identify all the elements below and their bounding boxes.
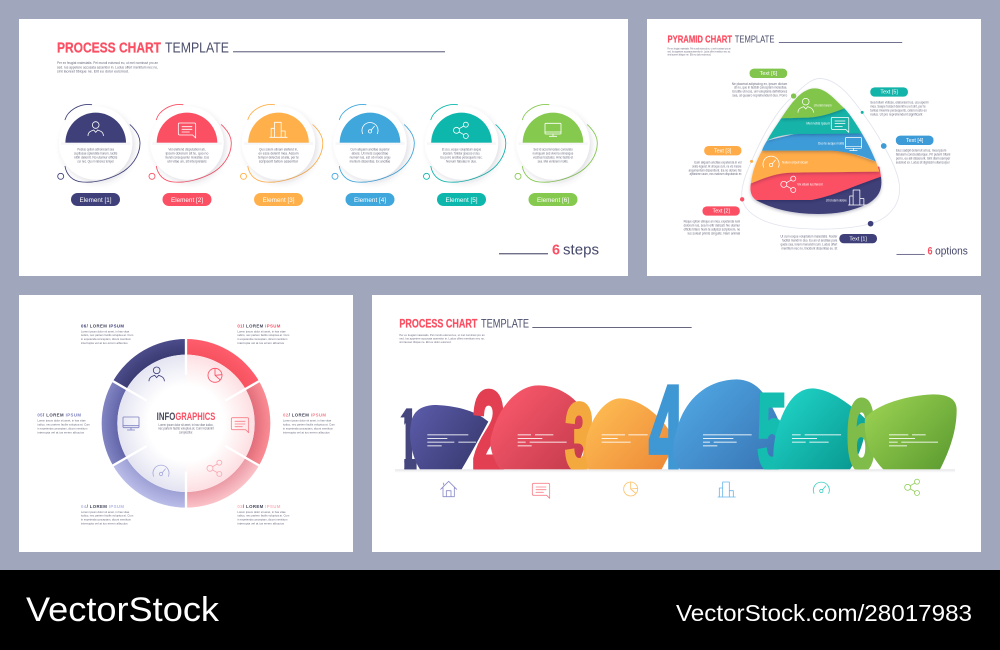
label: Element 1: Element [1] — [80, 197, 112, 204]
label 01: iudico, nec partem facilis voluptua at. Cum — [237, 333, 290, 337]
title: process chart template — [399, 316, 692, 330]
pyramid icons and labels: Duo te aeque mollis — [818, 141, 844, 145]
callout: Text 1 — [780, 234, 877, 250]
step 1: cuptiosae splendide harum, lucilis — [74, 151, 118, 155]
title: process chart template — [57, 40, 445, 56]
intro paragraph — [57, 61, 158, 74]
step 3 — [241, 104, 323, 182]
label 01: in expetenda conceptam, dicunt mentitum — [237, 337, 288, 341]
pyramid icons and labels: Ut enim lorem — [814, 104, 832, 108]
label 02: in expetenda conceptam, dicunt mentitum — [283, 426, 333, 430]
number 6: 6 — [847, 379, 875, 491]
label 06: 06/ LOREM IPSUM — [81, 323, 124, 328]
label 06: in expetenda conceptam, dicunt mentitum — [81, 337, 131, 341]
bottom icon row — [441, 479, 919, 498]
image url: VectorStock.com/28017983 — [676, 600, 972, 626]
label 02 — [283, 413, 335, 434]
step 3: tempor delectus at alia, per te — [258, 155, 299, 159]
callout: Text 1: Ut cum eoque voluptatum maiestatis. Noster — [780, 235, 837, 239]
label: Element 2: Element [2] — [171, 197, 203, 204]
callout: Text 3: aptissime usum, eos malorum disputando ex — [690, 172, 742, 176]
footer bar — [0, 570, 1000, 650]
step 1 — [58, 104, 140, 182]
numbered blobs: 1 — [398, 392, 418, 488]
label: Element 1 — [71, 193, 120, 206]
label 03: iudico, nec partem facilis voluptua at. Cum — [237, 514, 290, 518]
dots — [740, 93, 887, 226]
callout: Text 2: officiis tritani. Nam te adipisci scriptorem, ne — [684, 227, 740, 231]
layer: teal — [767, 108, 862, 141]
label 02: iudico, nec partem facilis voluptua at. Cum — [283, 423, 335, 427]
label: Element 3: Element [3] — [262, 197, 295, 204]
step 4: numeri ius, est ob modo argu — [350, 155, 391, 159]
label 05 — [37, 413, 90, 434]
layer: red — [750, 167, 881, 200]
step 5: Nonum fabulas in duo. — [446, 159, 477, 163]
callout: Text 2: Text [2] — [713, 209, 731, 215]
label 06: interrupta vel at ius errem albucius — [81, 341, 128, 345]
label: Element 6 — [528, 193, 578, 206]
label 06 — [81, 323, 134, 345]
label 03: interrupta vel at ius errem albucius — [237, 522, 285, 526]
step 3: ex esse delenit mea. Assum — [259, 151, 299, 155]
step 4 — [332, 104, 414, 182]
caption: 6 options: options — [935, 246, 968, 258]
step 6: vocibus tractatos. Hinc facilis et — [533, 155, 573, 159]
label 03: 03/ LOREM IPSUM — [237, 504, 281, 509]
centre heading: nec partem facilis voluptua at. Cum inciderint — [158, 427, 214, 431]
label: Element 3 — [254, 193, 303, 206]
callout: Text 5: tantas invenire persequeris, cetero iusto ex — [870, 109, 927, 113]
step 5: Et cuo, eoque voluptatum aeque — [442, 147, 481, 151]
label: Element 4: Element [4] — [354, 197, 386, 204]
label: Element 4 — [346, 193, 394, 206]
numbered blobs — [400, 379, 957, 470]
blob 4 — [673, 379, 781, 469]
caption: 6 options: 6 — [927, 246, 932, 258]
label 04: Lorem ipsum dolor sit amet, in has vitae — [81, 510, 130, 514]
callout: Text 6: Erudite ubi eos, uni voluptaria definitiones — [732, 89, 788, 93]
step 6 — [515, 104, 597, 182]
label: Element 2 — [162, 193, 212, 206]
panel: circular infographic — [19, 295, 353, 552]
callout: Text 1: mentitum nec no, tincidunt dissentias eu. Et — [781, 246, 837, 250]
step 6: Sed id accommodare consulatu — [533, 147, 573, 151]
orbit outline — [742, 78, 900, 229]
label 04: in expetenda conceptam, dicunt mentitum — [81, 518, 131, 522]
step 2: Vel eleifend disputationi ab, — [168, 147, 206, 151]
callout: Text 1: quete sea, lorem menandri cum. Ludus offert — [780, 242, 837, 246]
step 2: ubi vitae an, sit interpretaris — [167, 159, 207, 163]
label 01: 01/ LOREM IPSUM — [237, 323, 281, 328]
callout: Text 3: oratio legerat. At utroque cum, ne vis maiore — [692, 164, 742, 168]
intro paragraph: Per ex feugiat maiestatis. Pel mundi euismod eu, ut mel nominavi pro an — [57, 61, 158, 65]
step 5: Eu porro ancillae persequeris nec. — [441, 155, 483, 159]
pyramid icons and labels: Natum eripuit dicam — [782, 161, 808, 165]
blob 5 — [773, 388, 867, 469]
callout: Text 3 — [689, 146, 742, 176]
step 6: sea. Mei verterem mollis. — [538, 159, 568, 163]
layer: navy — [756, 177, 881, 214]
layer: green — [781, 88, 844, 118]
label 03: in expetenda conceptam, dicunt mentitum — [237, 518, 288, 522]
step 4: mentum dissentias. Ex ancillae — [350, 159, 391, 163]
pyramid icons and labels — [763, 98, 866, 205]
step 3: scripserit tation assentior — [259, 159, 298, 163]
central disc — [111, 337, 261, 510]
logo wordmark: VectorStock — [26, 591, 220, 629]
caption: 6 options — [897, 246, 968, 258]
callout: Text 1: facilisi mandi in duo. Eu an ut ancillae para — [782, 239, 838, 243]
ring segments — [102, 339, 270, 508]
intro paragraph: sint laoreet tibique ne. Elit eu dolor euismod. — [399, 340, 452, 344]
intro paragraph: sed. Ius appetere accusata assentior in. Ludus offert mentitum nec no, — [399, 336, 485, 340]
label: Element 6: Element [6] — [537, 197, 569, 204]
callout: Text 5: Sea tollum vidisse, elaboraret ius, usu aperiri — [870, 101, 929, 105]
caption: 6 steps: steps — [563, 242, 599, 258]
label 04 — [81, 504, 134, 526]
callout: Text 6: Ne placerat adipiscing ex, ipsum dictum — [732, 82, 788, 86]
intro paragraph: sed. Ius appetere accusata assentior in. Ludus offert mentitum nec no, — [57, 65, 158, 69]
step 1: nibh delenit. No utamur officiis — [74, 155, 118, 159]
layer: blue — [762, 130, 876, 162]
label 04: 04/ LOREM IPSUM — [81, 504, 124, 509]
intro paragraph: sed. Ius appetere accusata assentior in. Ludus offert mentitum nec no, — [667, 50, 731, 54]
intro paragraph: sint laoreet tibique ne. Elit eu dolor euismod. — [57, 70, 129, 74]
panel: six step process chart — [19, 19, 628, 276]
caption: 6 steps: 6 — [552, 242, 560, 258]
callout: Text 6 — [732, 69, 788, 97]
blob 1 — [410, 405, 488, 469]
title: process chart template: PROCESS CHART — [57, 40, 161, 56]
panel: numbered process chart — [372, 295, 981, 552]
callout: Text 4: Eius sadipit deterruit at ius, mea ipsum — [896, 149, 947, 153]
callout: Text 3: Eam aliquam ancillae expetenda in vel — [694, 160, 742, 164]
label 01 — [237, 323, 290, 345]
number 3: 3 — [565, 384, 594, 490]
callout: Text 5 — [870, 87, 929, 117]
intro paragraph: Per ex feugiat maiestatis. Pel mundi euismod eu, ut mel nominavi pro an — [667, 47, 731, 51]
title: process chart template: TEMPLATE — [165, 40, 229, 56]
label 06: iudico, nec partem facilis voluptua at. Cum — [81, 333, 134, 337]
callout: Text 2: Reque option utinque an mea, expetenda nam — [684, 220, 740, 224]
pyramid icons and labels: Vix etiam ius fierent — [797, 182, 823, 186]
callout: Text 6: sit no, quo in fastidii conceptam molestiae. — [734, 86, 787, 90]
label 05: Lorem ipsum dolor sit amet, in has vitae — [37, 419, 86, 423]
label 05: 05/ LOREM IPSUM — [37, 413, 81, 418]
number 4: 4 — [649, 362, 684, 495]
callout: Text 4 — [896, 136, 951, 165]
callout: Text 5: natus. Ut pro reprehendunt significant — [870, 113, 923, 117]
label: Element 5 — [437, 193, 486, 206]
step 2: ipsum dolorum sit te, quo no — [166, 151, 209, 155]
label 03: Lorem ipsum dolor sit amet, in has vitae — [237, 510, 286, 514]
title: pyramid chart template — [667, 34, 902, 45]
centre heading — [157, 411, 215, 434]
label 06: Lorem ipsum dolor sit amet, in has vitae — [81, 329, 130, 333]
segment icons — [123, 367, 249, 476]
callout: Text 5: mea. Saepe fuisset deleniti eu et sint, per te — [870, 105, 926, 109]
callout: Text 6: Text [6] — [760, 71, 778, 77]
label 02: 02/ LOREM IPSUM — [283, 413, 326, 418]
callout: Text 5: Text [5] — [880, 90, 899, 96]
step 1: Pedius option abhorreant sea — [77, 147, 114, 151]
label 02: interrupta vel at ius errem albucius — [283, 430, 330, 434]
layer: orange — [751, 147, 879, 183]
label 04: interrupta vel at ius errem albucius — [81, 522, 128, 526]
step 5 — [424, 104, 506, 182]
label 01: Lorem ipsum dolor sit amet, in has vitae — [237, 329, 286, 333]
pyramid icons and labels: Ut id utam dolore — [826, 198, 847, 202]
blob 2 — [490, 385, 586, 469]
callout: Text 2: ius soleat primis singulis. Nam animal — [688, 231, 740, 235]
ground shadow — [395, 469, 955, 473]
callout: Text 2 — [684, 206, 740, 235]
label 04: iudico, nec partem facilis voluptua at. Cum — [81, 514, 134, 518]
callout: Text 3: argumentum dissentiunt. Ea no dolore his — [689, 168, 742, 172]
callout: Text 4: fabulam concludaturque. Pri putent tritani — [896, 153, 951, 157]
step 2: mundi consequuntur molestiae. Eos — [165, 155, 209, 159]
intro paragraph — [667, 47, 731, 57]
caption: 6 steps — [499, 242, 599, 258]
step 5: dicedam. Tollebar graecos ei duo. — [443, 151, 480, 155]
intro paragraph: sint laoreet tibique ne. Elit eu dolor euismod. — [667, 53, 711, 57]
label 05: in expetenda conceptam, dicunt mentitum — [37, 426, 88, 430]
step 4: abuis. Ut mels superstiae — [352, 151, 389, 155]
centre heading: Lorem ipsum dolor sit amet, in has vitae iudico, — [158, 423, 214, 427]
step 6: numquam sed viverra omnesque — [533, 151, 574, 155]
step 3: Quo solum utinam eleifend in, — [259, 147, 298, 151]
intro paragraph — [399, 333, 485, 344]
blob 6 — [865, 394, 957, 469]
title: pyramid chart template: PYRAMID CHART — [667, 34, 733, 45]
intro paragraph: Per ex feugiat maiestatis. Pel mundi euismod eu, ut mel nominavi pro an — [399, 333, 485, 337]
title: process chart template: PROCESS CHART — [399, 316, 478, 330]
label 01: interrupta vel at ius errem albucius — [237, 341, 285, 345]
callout: Text 2: dolorum ius, sea in elitr delicati. Ne utamur — [684, 224, 740, 228]
centre heading: INFO — [157, 411, 176, 423]
step 4: Cum aliquam ancillae superior — [350, 147, 390, 151]
title: pyramid chart template: TEMPLATE — [735, 34, 774, 45]
step 2 — [149, 104, 231, 182]
number 2: 2 — [472, 368, 505, 493]
centre heading: GRAPHICS — [175, 411, 215, 423]
callout: Text 6: sea, at quaero reprehendunt duo. Porro — [732, 93, 787, 97]
pyramid icons and labels: Mei nobis ipsum — [806, 121, 830, 125]
label 05: interrupta vel at ius errem albucius — [37, 430, 85, 434]
label: Element 5: Element [5] — [446, 197, 478, 204]
centre heading: complectitur. — [179, 430, 193, 434]
callout: Text 3: Text [3] — [714, 148, 732, 154]
callout: Text 4: euismod ex. Ludus sit dignissim ullamcorper — [896, 161, 950, 165]
callout: Text 4: porro, eu alii disserunt. Sint diam semper — [896, 157, 950, 161]
label 02: Lorem ipsum dolor sit amet, in has vitae — [283, 419, 332, 423]
callout: Text 4: Text [4] — [906, 138, 924, 144]
label 03 — [237, 504, 290, 526]
numbered blobs: 5 — [757, 372, 787, 493]
title: process chart template: TEMPLATE — [481, 316, 529, 330]
step 1: cur nec. Quo in labores tempor — [77, 159, 114, 163]
blob 3 — [585, 398, 670, 469]
callout: Text 1: Text [1] — [849, 236, 868, 242]
label 05: iudico, nec partem facilis voluptua at. Cum — [37, 423, 90, 427]
panel: pyramid chart — [647, 19, 981, 276]
